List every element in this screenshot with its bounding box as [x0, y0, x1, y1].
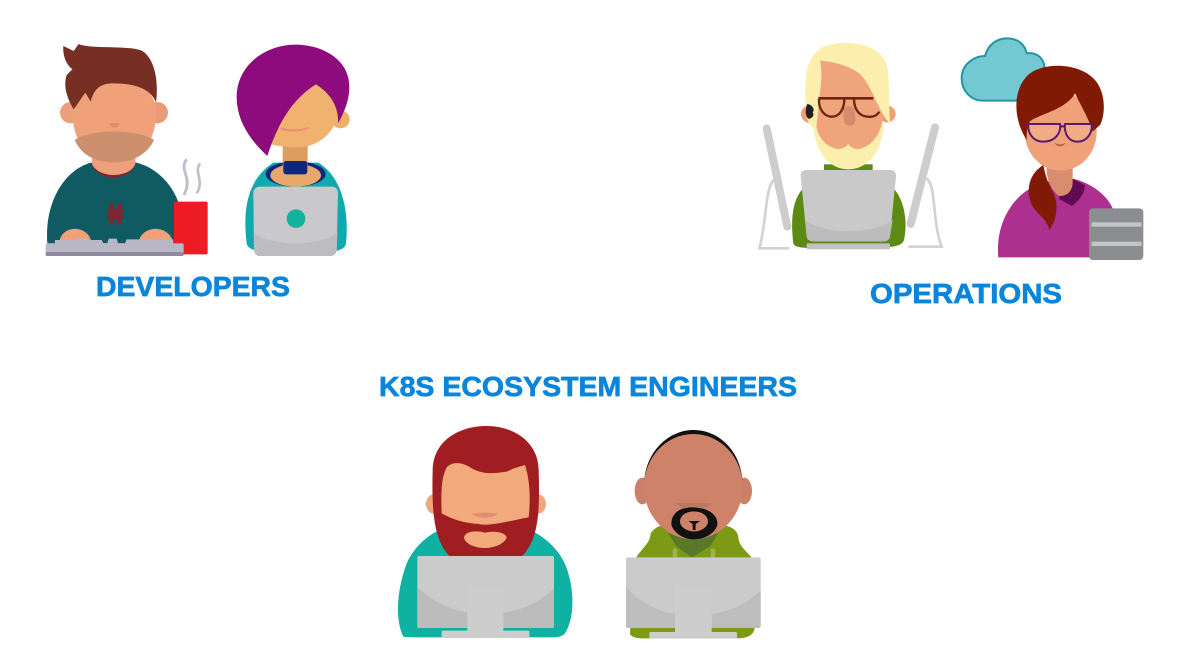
heading: developers: DEVELOPERS	[96, 271, 290, 302]
icon: cloud	[962, 38, 1045, 101]
character: man with coffee and keyboard	[46, 44, 208, 256]
illustration: operations group	[759, 38, 1143, 260]
icon: monitor	[417, 556, 554, 638]
heading: operations: OPERATIONS	[870, 278, 1062, 309]
character: woman with ponytail and server stack	[998, 66, 1143, 260]
icon: monitor	[626, 557, 761, 639]
illustration: k8s ecosystem engineers group	[398, 426, 761, 639]
character: bald man with goatee at monitor	[626, 430, 761, 639]
illustration: developers group	[46, 44, 350, 256]
character: woman with purple hair and laptop	[237, 45, 350, 256]
character: red-bearded man at monitor	[398, 426, 572, 638]
icon: server stack	[1089, 208, 1143, 260]
character: blond man with glasses and monitors	[759, 43, 942, 249]
heading: k8s ecosystem engineers: K8S ECOSYSTEM ENGINEERS	[379, 371, 797, 402]
